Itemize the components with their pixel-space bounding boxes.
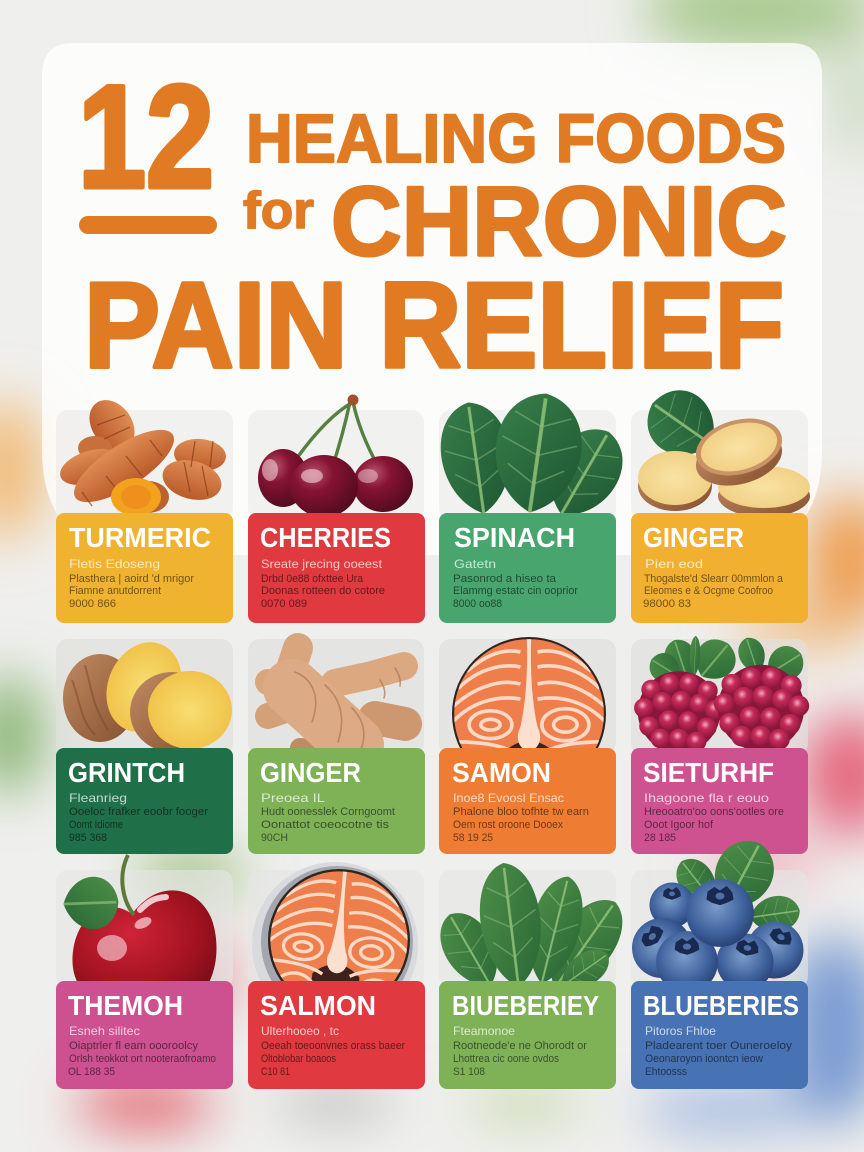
label: Oomt Idiome — [69, 819, 123, 831]
label: Hreooatro'oo oons'ootles ore — [644, 806, 784, 818]
label: 0070 089 — [261, 598, 307, 610]
card: blueberries — [620, 830, 813, 1089]
label: 9000 866 — [69, 598, 116, 610]
label: Preoea IL — [261, 791, 325, 805]
card: grintch — [56, 631, 233, 854]
card: cherries — [248, 394, 425, 623]
card: spinach — [434, 388, 637, 623]
label: 58 19 25 — [453, 832, 493, 844]
title — [78, 55, 787, 393]
label — [631, 513, 808, 623]
image panel — [631, 639, 808, 755]
label — [56, 513, 233, 623]
label: Hudt oonesslek Corngoomt — [261, 806, 395, 818]
label — [631, 981, 808, 1089]
label: THEMOH — [68, 990, 183, 1021]
title number 12: 12 — [78, 55, 214, 218]
label: Elammg estatc cin ooprior — [453, 585, 578, 597]
label: SPINACH — [454, 522, 575, 553]
label: Rootneode'e ne Ohorodt or — [453, 1040, 587, 1052]
label: Eleomes e & Ocgme Coofroo — [644, 585, 773, 597]
label: Gatetn — [454, 557, 496, 571]
card: ginger slices — [631, 377, 810, 623]
label — [56, 981, 233, 1089]
label: Fteamonoe — [453, 1024, 515, 1038]
label: SAMON — [452, 757, 551, 788]
image panel — [248, 410, 424, 520]
icon: ginger slices with leaf — [634, 377, 810, 517]
label: Drbd 0e88 ofxttee Ura — [261, 573, 364, 585]
label — [439, 981, 616, 1089]
icon: salmon on plate — [252, 862, 418, 1028]
image panel — [631, 410, 808, 520]
label: SIETURHF — [643, 757, 774, 788]
label: Ehtoosss — [645, 1066, 687, 1078]
label: 985 368 — [69, 832, 107, 844]
icon: spinach leaves — [434, 388, 637, 531]
image panel — [56, 870, 233, 988]
icon: blueberries with leaves — [620, 830, 813, 995]
image panel — [56, 639, 233, 755]
label: Ihagoone fla r eouo — [644, 791, 769, 805]
label — [439, 513, 616, 623]
label: Lhottrea cic oone ovdos — [453, 1053, 559, 1065]
label: BIUEBERIEY — [452, 990, 599, 1021]
image panel — [439, 870, 616, 988]
image panel — [248, 870, 424, 988]
card: turmeric — [56, 391, 233, 623]
label: Pasonrod a hiseo ta — [453, 573, 557, 585]
label: BLUEBERIES — [643, 990, 799, 1021]
label: Oeonaroyon ioontcn ieow — [645, 1053, 763, 1065]
label: Phalone bloo tofhte tw earn — [453, 806, 589, 818]
icon: turmeric roots — [56, 391, 227, 516]
label — [248, 981, 425, 1089]
image panel — [631, 870, 808, 988]
label: Doonas rotteen do cotore — [261, 585, 385, 597]
label: Ulterhooeo , tc — [261, 1024, 339, 1038]
label: Fletis Edoseng — [69, 557, 160, 571]
image panel — [56, 410, 233, 520]
label: Inoe8 Evoosl Ensac — [453, 791, 564, 805]
card: ginger root — [248, 639, 425, 854]
label: Pladearent toer Ouneroeloy — [645, 1040, 793, 1052]
title underline bar — [79, 216, 217, 234]
label: Oltoblobar boaoos — [261, 1053, 336, 1065]
label: 90CH — [261, 832, 288, 844]
label: GINGER — [643, 522, 744, 553]
title word: chronic: CHRONIC — [331, 166, 787, 276]
label — [439, 748, 616, 854]
label: 98000 83 — [643, 598, 691, 610]
label — [631, 748, 808, 854]
label: Oiaptrler fl eam oooroolcy — [69, 1040, 199, 1052]
label: TURMERIC — [69, 522, 211, 553]
label: CHERRIES — [260, 522, 391, 553]
title line: pain relief: PAIN RELIEF — [84, 257, 784, 393]
icon: cherries — [258, 394, 413, 517]
label: Fiamne anutdorrent — [69, 585, 161, 597]
icon: red cherry with leaf — [63, 855, 217, 1000]
card: salmon — [248, 862, 425, 1089]
title word: for: for — [243, 182, 314, 240]
label: Plasthera | aoird 'd mrigor — [69, 573, 194, 585]
icon: ginger root — [268, 648, 405, 752]
icon: salmon steak — [452, 637, 606, 791]
image panel — [439, 410, 616, 520]
label: GINGER — [260, 757, 361, 788]
title panel — [42, 43, 822, 555]
label: C10 81 — [261, 1066, 290, 1078]
label: 28 185 — [644, 832, 676, 844]
label: Oeeah toeoonvnes orass baeer — [261, 1040, 405, 1052]
label: S1 108 — [453, 1066, 485, 1078]
label: Ooeloc frafker eoobr fooger — [69, 806, 208, 818]
label: Thogalste'd Slearr 00mmlon a — [644, 573, 784, 585]
image panel — [439, 639, 616, 755]
label: SALMON — [260, 990, 376, 1021]
label — [248, 513, 425, 623]
label: Ooot Igoor hof — [644, 819, 714, 831]
label: 8000 oo88 — [453, 598, 502, 610]
label: OL 188 35 — [68, 1066, 115, 1078]
label: Fleanrieg — [69, 791, 127, 805]
icon: green leaves — [429, 859, 637, 1004]
label: Sreate jrecing ooeest — [261, 557, 383, 571]
label — [248, 748, 425, 854]
icon: raspberries — [634, 631, 810, 753]
label: Pien eod — [645, 557, 703, 571]
card: samon — [439, 637, 616, 854]
label: GRINTCH — [68, 757, 185, 788]
image panel — [248, 639, 424, 755]
label: Esneh silitec — [69, 1024, 140, 1038]
card: biueberiey — [429, 859, 637, 1089]
icon: halved yellow root — [63, 631, 232, 752]
title line: healing foods: HEALING FOODS — [246, 100, 786, 177]
label — [56, 748, 233, 854]
label: Oem rost oroone Dooex — [453, 819, 563, 831]
label: Oonattot coeocotne tis — [261, 819, 390, 831]
card: themoh — [56, 855, 233, 1089]
label: Orlsh teokkot ort nooteraofroamo — [69, 1053, 216, 1065]
label: Pitoros Fhloe — [645, 1024, 716, 1038]
card: sieturhf — [631, 631, 810, 854]
